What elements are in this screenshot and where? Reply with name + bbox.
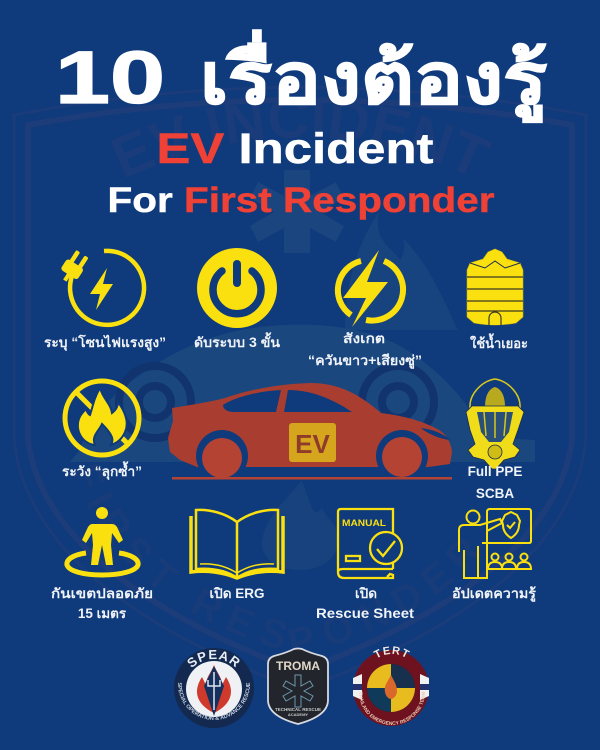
label: PPE SCBA [468,464,522,501]
logo: TROMA: TROMA [276,659,320,673]
icon: water tank [467,249,523,325]
title: 10 [55,36,165,119]
logo: TERT: THAILAND EMERGENCY RESPONSE TEAM [359,692,426,725]
label: safe zone [51,586,153,621]
logo: TROMA: TECHNICAL RESCUE [275,707,321,712]
label: rescue sheet [316,586,415,621]
icon: safe perimeter [67,507,138,575]
label: observe: สังเกต [343,331,385,346]
label: high-voltage zone: ระบุ “โซนไฟแรงสูง” [44,333,166,351]
badge: EV: EV [295,429,330,459]
label: observe: “ควันขาว+เสียงซู่” [308,353,422,369]
logo: TROMA: ACADEMY [288,712,308,717]
logo: TERT [353,646,429,726]
logo: TERT: TERT [373,646,410,658]
label: update knowledge: อัปเดตความรู้ [452,586,537,602]
icon: plug with high-voltage zone [56,248,144,325]
illustration: EV car [168,383,452,482]
label: use plenty of water: ใช้น้ำเยอะ [470,333,528,351]
icon: PPE SCBA mask [466,379,524,469]
label: PPE SCBA: SCBA [476,486,514,501]
text: FIRST RESPONDER [73,463,482,648]
icon: power button [197,248,277,328]
label: rescue sheet: เปิด [355,586,377,601]
logo: TROMA [268,648,328,724]
label: PPE SCBA: Full PPE [468,464,522,479]
label: rescue sheet: Rescue Sheet [316,606,415,621]
title: เรื่องต้องรู้ [200,29,547,123]
logo: SPEAR: SPECIAL OPERATION & ADVANCE RESCUE [178,682,250,720]
icon: teacher presenting [459,509,531,578]
label: observe [308,331,422,369]
icon: open ERG book [191,510,283,578]
subtitle: For First Responder: For First Responder [108,181,495,220]
icon: rescue manual [338,509,402,578]
logo: SPEAR: SPEAR [188,650,240,668]
label: reignition: ระวัง “ลุกซ้ำ” [62,461,142,480]
text: EV INCIDENT [110,103,492,178]
title [55,29,547,123]
label: safe zone: กันเขตปลอดภัย [51,586,153,601]
badge: EV [289,423,336,462]
label: open ERG: เปิด ERG [210,586,264,601]
subtitle: EV Incident: EV Incident [156,125,434,173]
logo: SPEAR [174,648,254,728]
label: safe zone: 15 เมตร [78,606,127,621]
label: shut down: ดับระบบ 3 ขั้น [194,332,281,350]
icon: rescue manual: MANUAL [342,518,387,528]
icon: no fire [65,381,139,455]
icon: lightning bolt [338,250,403,327]
